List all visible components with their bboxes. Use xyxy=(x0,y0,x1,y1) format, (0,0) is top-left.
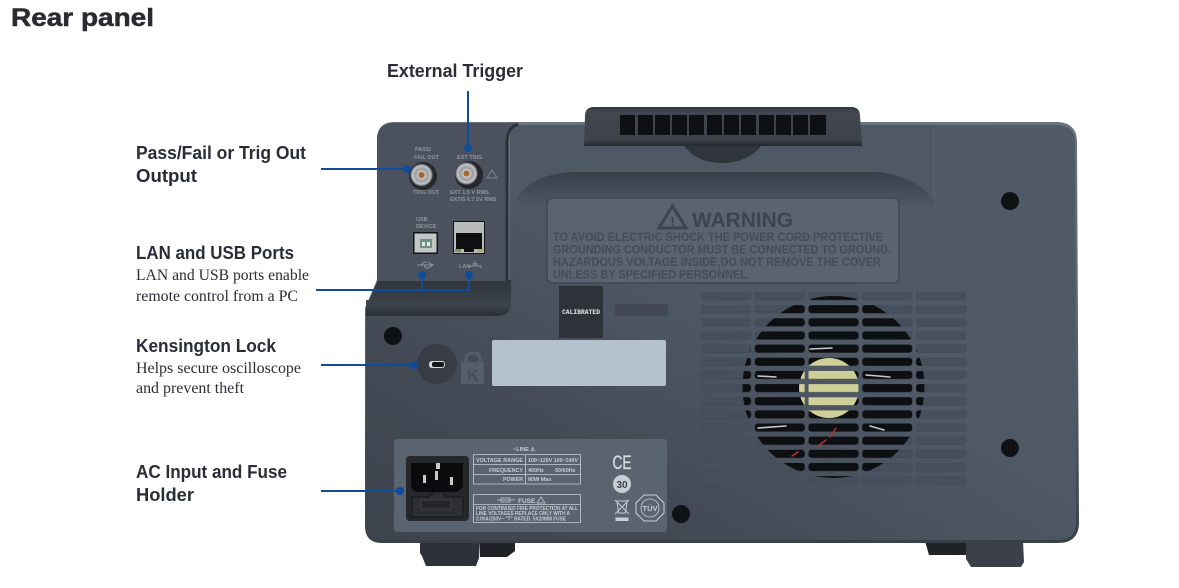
mounting screws xyxy=(384,192,1019,523)
connector labels xyxy=(413,147,497,270)
label: LAN and USB ports xyxy=(136,243,309,305)
kensington lock xyxy=(417,344,484,385)
connector labels: TRIG OUT xyxy=(413,190,440,196)
voltage table xyxy=(474,446,580,484)
arrow: pass/fail output xyxy=(321,168,406,170)
label: pass/fail output: Output xyxy=(136,166,197,186)
calibrated sticker: CALIBRATED xyxy=(562,309,600,317)
recessed band xyxy=(512,172,934,210)
calibrated sticker xyxy=(559,286,603,338)
callout dots xyxy=(396,144,473,495)
icon: 30 year circle xyxy=(613,475,631,493)
icon: CE mark: CE xyxy=(612,453,632,474)
warning plate xyxy=(547,198,899,283)
label: LAN and USB ports: LAN and USB Ports xyxy=(136,243,294,263)
AC inlet and fuse holder xyxy=(406,456,469,521)
USB device port xyxy=(413,232,438,254)
arrow: LAN and USB xyxy=(316,275,469,290)
label: LAN and USB ports: remote control from a PC xyxy=(136,288,298,305)
label: Kensington lock: Helps secure oscilloscope xyxy=(136,360,301,377)
fan grille xyxy=(701,292,967,486)
label: AC input and fuse holder: AC Input and Fuse xyxy=(136,462,287,482)
fan glints and wires xyxy=(758,348,890,456)
connector labels: FAIL OUT xyxy=(414,155,440,161)
icon: LAN symbol xyxy=(469,261,481,268)
fuse box: 2.00A/250V~ "T" RATED, 5X20MM FUSE xyxy=(476,516,567,522)
label: external trigger: External Trigger xyxy=(387,61,523,81)
callout lines xyxy=(316,91,469,491)
fan hub sticker xyxy=(799,358,859,418)
icon: 30 year circle: 30 xyxy=(616,480,628,491)
connector labels: USB xyxy=(416,217,428,223)
voltage table: POWER xyxy=(503,477,523,483)
icon: crossed-out bin xyxy=(615,500,629,520)
connector labels: PASS/ xyxy=(415,147,432,153)
small label recess xyxy=(615,304,668,316)
connector panel xyxy=(377,123,518,281)
warning heading: WARNING xyxy=(692,209,793,232)
BNC connector: external trigger xyxy=(455,161,483,189)
voltage table: VOLTAGE RANGE xyxy=(476,458,523,464)
voltage table: FREQUENCY xyxy=(489,468,523,474)
warning text: TO AVOID ELECTRIC SHOCK THE POWER CORD PROTECTIVE xyxy=(553,232,883,244)
warning text xyxy=(553,232,891,282)
upper housing step xyxy=(510,125,934,200)
icon: USB symbol xyxy=(417,262,433,268)
AC and compliance plate xyxy=(394,439,667,532)
icon: warning triangle xyxy=(659,206,686,229)
icon: padlock K: K xyxy=(467,366,480,385)
feet xyxy=(420,541,1024,567)
label: pass/fail output xyxy=(136,143,306,186)
fuse box: FOR CONTINUED FIRE PROTECTION AT ALL xyxy=(476,506,578,512)
label: Kensington lock: Kensington Lock xyxy=(136,336,277,356)
icon: TUV certification: TÜV xyxy=(642,504,658,513)
warning text: GROUNDING CONDUCTOR MUST BE CONNECTED TO GROUND. xyxy=(553,244,891,256)
fuse box: FUSE xyxy=(518,498,536,505)
voltage table: 80W Max xyxy=(528,477,552,483)
serial number label xyxy=(492,340,666,386)
voltage table: 50/60Hz xyxy=(555,468,576,474)
fuse box xyxy=(474,494,580,522)
handle vent holes xyxy=(620,115,826,135)
icon: TUV certification xyxy=(636,495,664,521)
title: Rear panel xyxy=(11,4,154,32)
instrument body xyxy=(365,122,1079,543)
label: Kensington lock: and prevent theft xyxy=(136,380,245,397)
label: LAN and USB ports: LAN and USB ports enable xyxy=(136,267,309,284)
voltage table: 400Hz xyxy=(528,468,544,474)
warning text: HAZARDOUS VOLTAGE INSIDE,DO NOT REMOVE THE COVER xyxy=(553,257,882,269)
arrow: external trigger xyxy=(467,91,469,148)
carry handle xyxy=(584,107,862,163)
body face xyxy=(366,125,1076,540)
label: pass/fail output: Pass/Fail or Trig Out xyxy=(136,143,306,163)
connector labels: EXT 1.5 V RMS xyxy=(450,190,489,196)
connector labels: LAN xyxy=(459,264,470,270)
fan behind grille xyxy=(742,296,924,478)
LAN port xyxy=(453,221,485,254)
fuse box: LINE VOLTAGES REPLACE ONLY WITH A xyxy=(476,511,570,517)
voltage table: 100~120V 100~240V xyxy=(528,458,578,464)
BNC connector: pass/fail out xyxy=(409,162,437,190)
connector labels: EXT/5 0.7.5V RMS xyxy=(450,197,497,203)
arrow: Kensington lock xyxy=(321,364,414,366)
arrow: AC input xyxy=(321,490,400,492)
oscilloscope rear view xyxy=(365,107,1079,567)
icon: caution triangle xyxy=(487,170,497,178)
voltage table: ~LINE ⚠ xyxy=(513,446,536,453)
connector labels: EXT TRIG xyxy=(457,155,482,161)
icon: warning triangle: ! xyxy=(670,214,675,229)
warning text: UNLESS BY SPECIFIED PERSONNEL. xyxy=(553,270,750,282)
connector labels: DEVICE xyxy=(416,224,437,230)
label: AC input and fuse holder xyxy=(136,462,287,505)
label: Kensington lock xyxy=(136,336,301,397)
label: AC input and fuse holder: Holder xyxy=(136,485,194,505)
connector recess xyxy=(366,280,511,316)
